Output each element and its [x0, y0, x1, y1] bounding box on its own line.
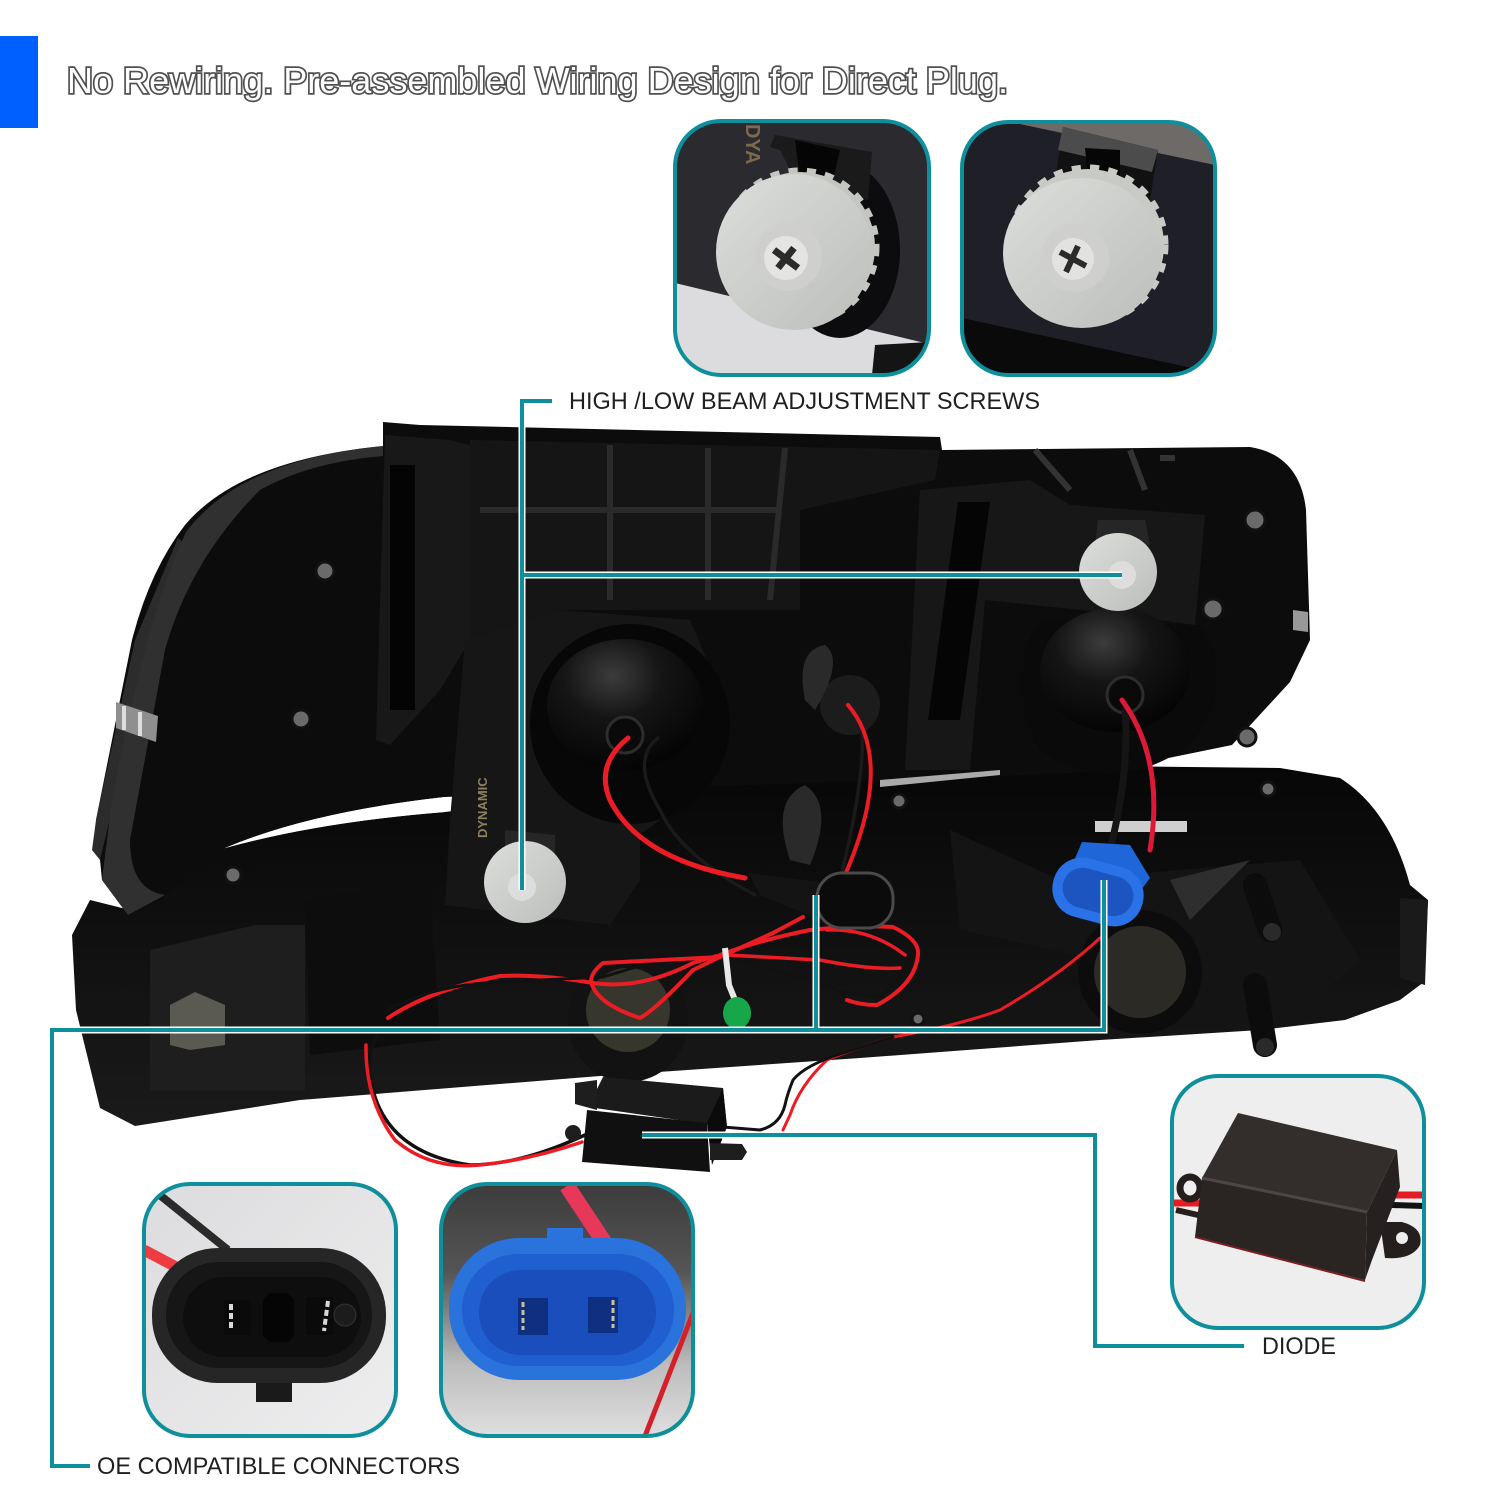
diode box on wiring — [565, 1077, 747, 1172]
vertical left bracket — [376, 435, 470, 745]
title: No Rewiring. Pre-assembled Wiring Design for Direct Plug. — [67, 60, 1008, 101]
illustration: headlight and bumper light assembly — [72, 422, 1428, 1172]
housing left rim — [102, 446, 383, 915]
lens circle centre — [568, 962, 688, 1082]
callout lines: high/low beam adjustment screws — [522, 401, 1122, 890]
adjustment screw disc left — [484, 830, 566, 923]
lower-left bulb bracket — [445, 610, 720, 925]
white label — [1095, 821, 1187, 832]
logo text: DYNAMIC — [475, 777, 490, 838]
tubes on lower housing — [1255, 885, 1281, 1056]
lower housing shiny right — [950, 830, 1360, 1030]
panel: black connector close-up — [144, 1184, 396, 1436]
callout lines: OE compatible connectors — [52, 880, 1104, 1466]
upper headlight housing — [96, 422, 1310, 915]
label: diode: DIODE — [1262, 1333, 1336, 1360]
wires — [366, 700, 1154, 1166]
grey gap reflection — [880, 770, 1000, 787]
lens circle right — [1078, 910, 1202, 1034]
zip tie and green sticker — [723, 948, 751, 1029]
centre grommets — [783, 645, 880, 865]
metal clip left — [116, 702, 158, 742]
top right ribs — [1035, 450, 1175, 490]
black plug connector — [748, 873, 893, 928]
panel: adjustment screw close-up 2 — [962, 122, 1215, 375]
top ribbed panel — [470, 440, 940, 640]
bulb left — [530, 624, 730, 824]
housing screws — [225, 510, 1275, 1025]
adjustment screw disc right — [1079, 520, 1157, 611]
panel: adjustment screw close-up 1 — [675, 121, 929, 375]
white gap reflection — [225, 797, 445, 848]
right arm bracket — [905, 480, 1205, 770]
callout lines: diode — [642, 1135, 1244, 1346]
lens edge strip — [92, 538, 186, 860]
blue plug connector — [1046, 842, 1150, 933]
blue accent tab — [0, 36, 38, 128]
panel: blue connector close-up — [441, 1184, 693, 1436]
label: OE compatible connectors: OE COMPATIBLE CONNECTORS — [97, 1453, 460, 1480]
bulb right — [1020, 620, 1218, 774]
lower housing detail blocks — [150, 925, 305, 1090]
panel: diode close-up — [1172, 1076, 1424, 1328]
right clip — [1293, 610, 1308, 632]
label: high/low beam adjustment screws: HIGH /LOW BEAM ADJUSTMENT SCREWS — [569, 388, 1040, 415]
panel: adjustment screw close-up 1: DYA — [741, 124, 763, 164]
right tab of bumper light — [1400, 898, 1428, 985]
lower bumper light housing — [72, 766, 1428, 1126]
